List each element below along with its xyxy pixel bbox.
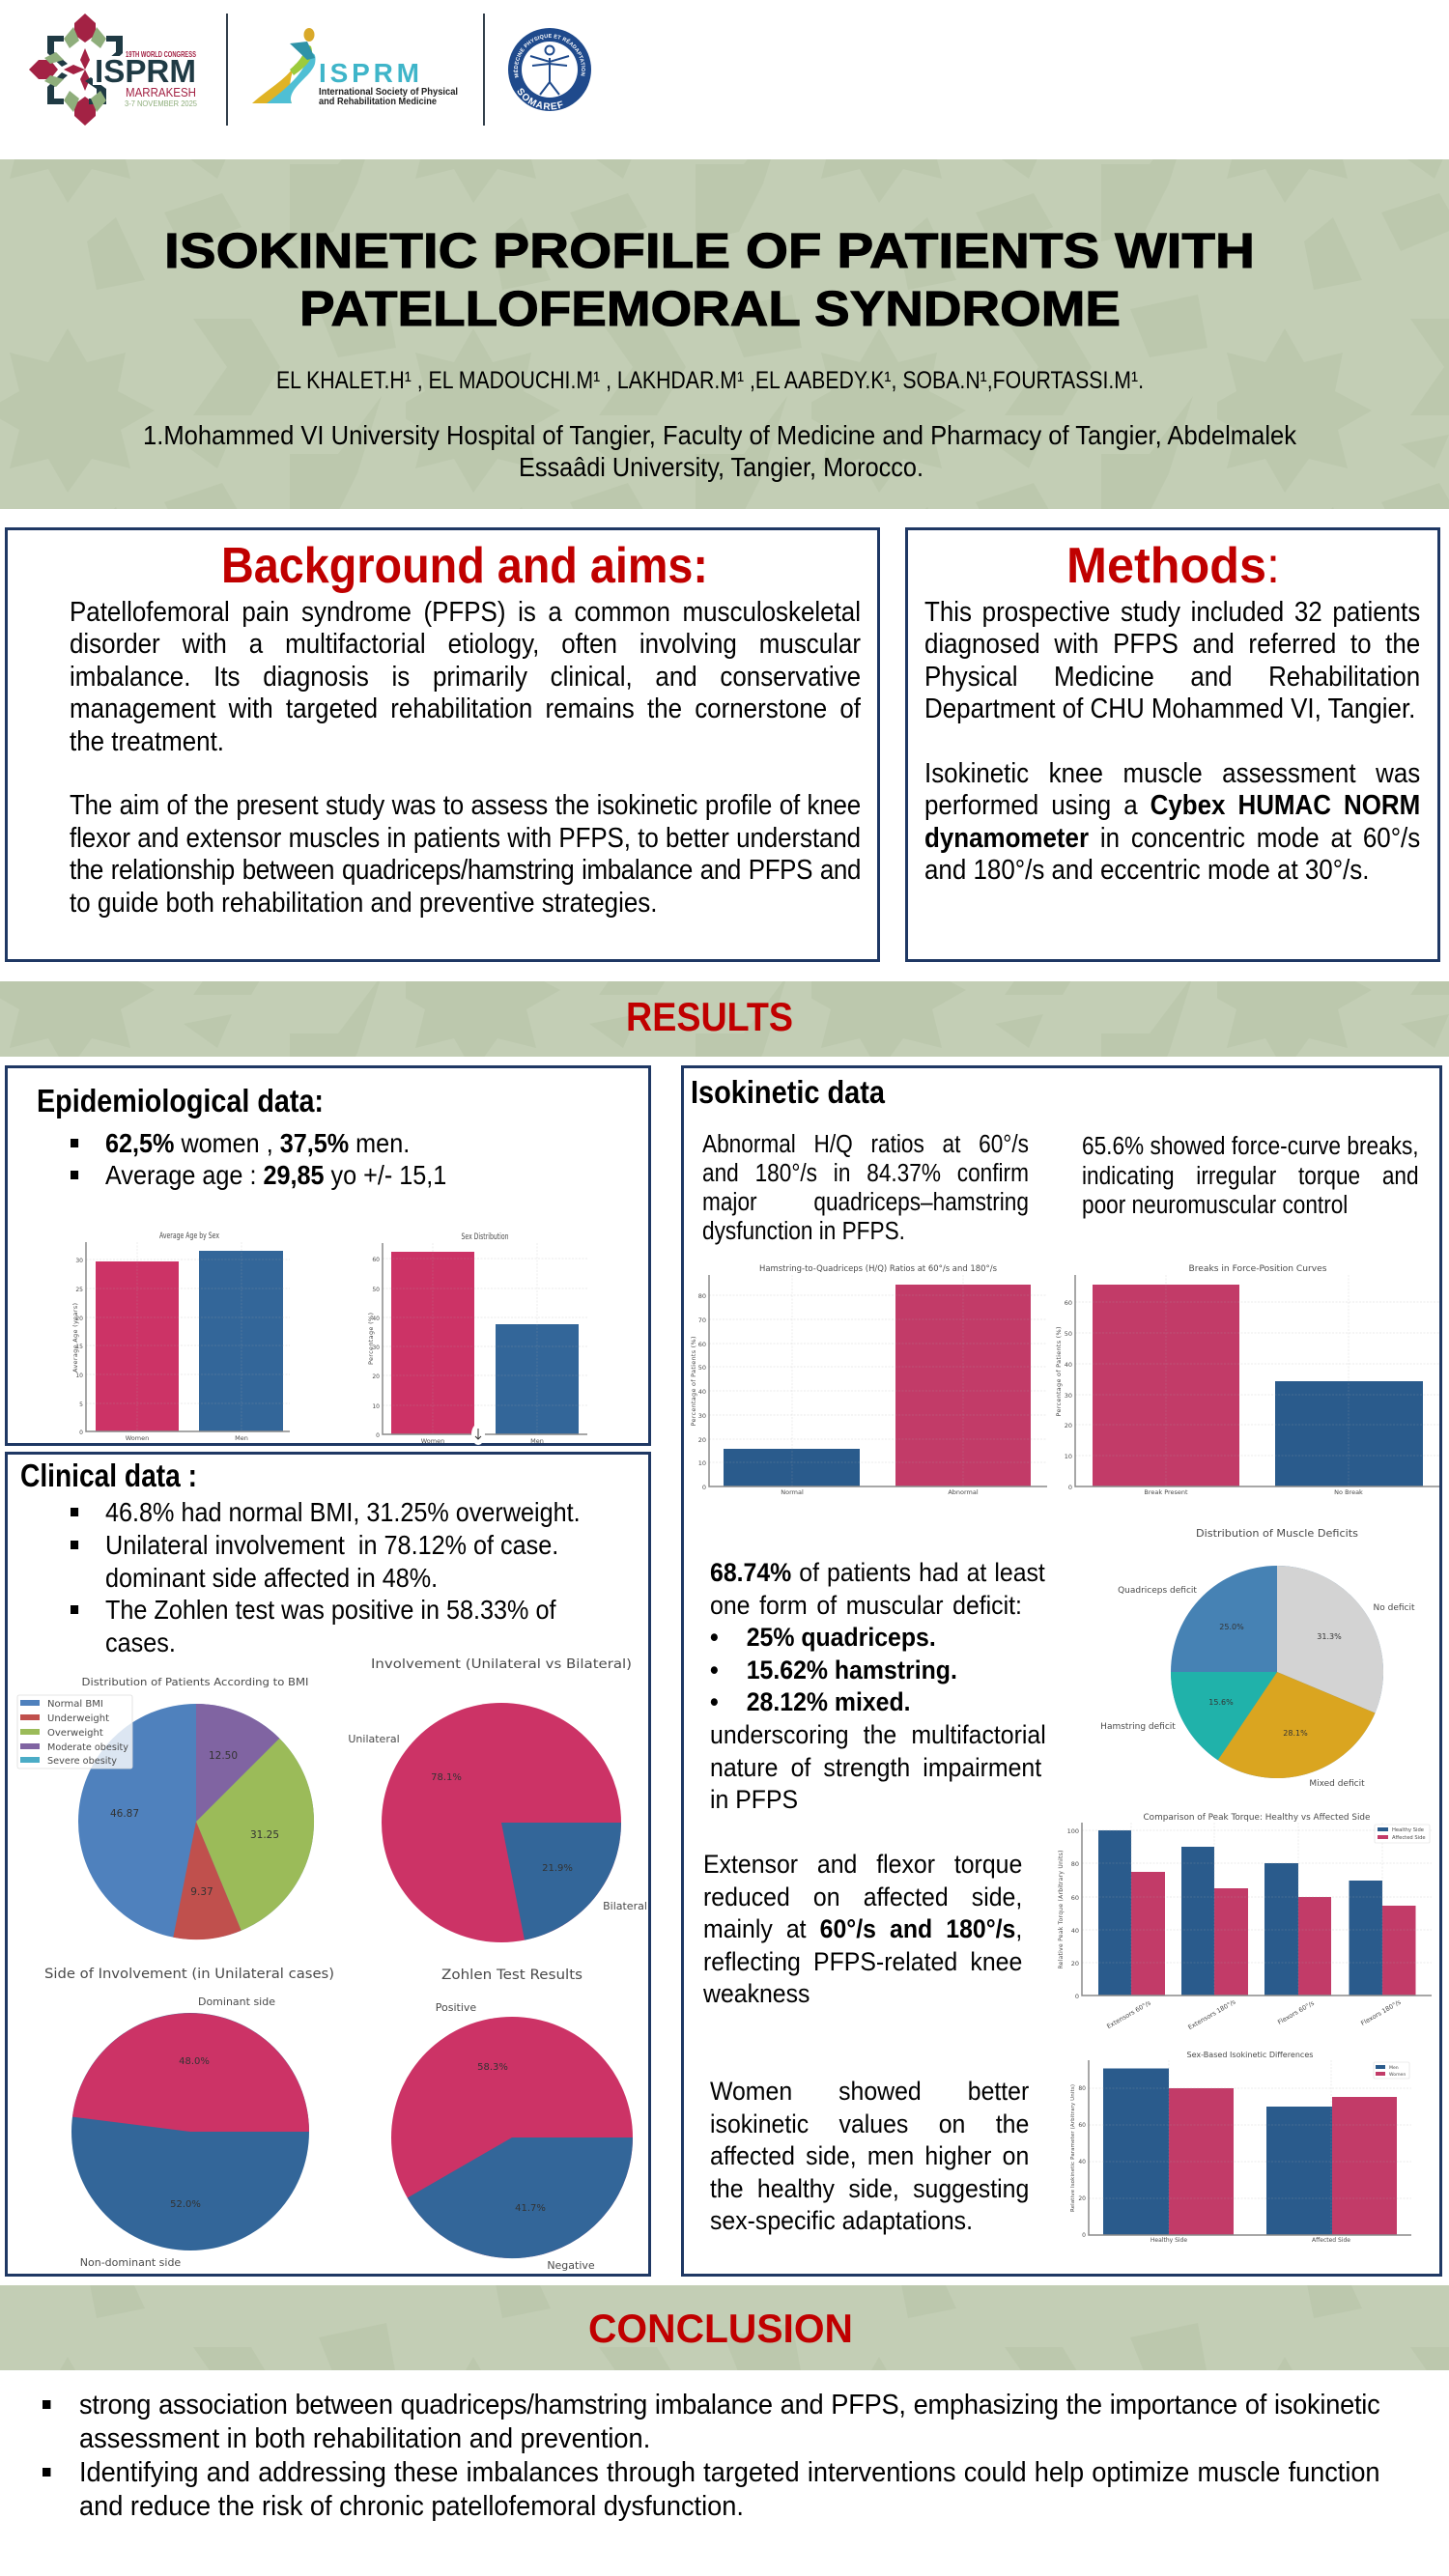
legend: BMI categories: Overweight [47,1728,103,1739]
chart: sex distribution [367,1232,587,1445]
chart: breaks in force-position curves: 50 [1065,1330,1072,1338]
logo: ISPRM society: and Rehabilitation Medicine [319,97,437,107]
chart: sex-based isokinetic differences: Sex-Based Isokinetic Differences [1186,2051,1314,2059]
chart: breaks in force-position curves: 0 [1068,1484,1072,1491]
chart: peak torque comparison: Extensors 60°/s [1105,1998,1152,2030]
chart: side of involvement pie [44,1967,334,2269]
list: conclusion [43,2390,1379,2522]
chart: BMI pie: 46.87 [110,1808,139,1820]
text: muscular deficit finding: • [710,1687,719,1716]
chart: average age by sex: Women [126,1434,149,1442]
chart: average age by sex [71,1231,290,1442]
chart: sex distribution: 50 [372,1287,380,1293]
text: methods: Department of CHU Mohammed VI, Tangier. [924,694,1415,724]
text: muscular deficit finding: 15.62% hamstring. [747,1656,957,1684]
title [164,223,1255,336]
affiliation [143,420,1297,482]
chart: muscle deficits pie [1100,1528,1415,1789]
chart: involvement pie: Unilateral [348,1733,400,1745]
chart: H/Q ratios: 70 [698,1316,706,1324]
chart: peak torque comparison: 100 [1067,1827,1079,1835]
list: conclusion: strong association between quadriceps/hamstring imbalance and PFPS, emphasizing the importance of isokinetic [79,2390,1379,2420]
text: methods: Physical Medicine and Rehabilitation [924,662,1420,693]
chart: peak torque comparison: Relative Peak Torque (Arbitrary Units) [1058,1851,1065,1968]
logo: SOMAREF: SOMAREF [518,88,563,110]
logo: ISPRM society: ISPRM [319,58,419,88]
chart: side of involvement pie: Dominant side [198,1996,275,2008]
text: muscular deficit finding: 25% quadriceps. [747,1623,936,1652]
chart: average age by sex: 0 [79,1430,83,1436]
title: ISOKINETIC PROFILE OF PATIENTS WITH [164,223,1255,278]
panel: clinical data [5,1452,651,2277]
chart: sex-based isokinetic differences: Affected Side [1312,2237,1350,2244]
chart: muscle deficits pie: 25.0% [1219,1623,1244,1631]
chart: sex-based isokinetic differences: 60 [1078,2122,1086,2129]
chart: breaks in force-position curves: 20 [1065,1422,1072,1430]
list: clinical findings: The Zohlen test was positive in 58.33% of [105,1595,555,1625]
legend: men vs women [1374,2062,1409,2079]
chart: sex-based isokinetic differences: 40 [1078,2159,1086,2166]
chart: sex distribution: Percentage (%) [367,1313,375,1365]
chart: side of involvement pie: 52.0% [170,2199,201,2210]
list: clinical findings: dominant side affected in 48%. [105,1563,438,1593]
chart: Zohlen test pie: Zohlen Test Results [441,1967,582,1983]
chart: side of involvement pie: Side of Involvement (in Unilateral cases) [44,1967,334,1982]
chart: peak torque comparison: Flexors 180°/s [1359,1997,1403,2027]
chart: sex distribution: Women [421,1437,444,1445]
logo: ISPRM Marrakesh congress [29,14,199,126]
legend: BMI categories: Underweight [47,1713,109,1724]
logo: ISPRM Marrakesh congress: 3-7 NOVEMBER 2025 [125,99,197,108]
chart: Zohlen test pie: 58.3% [477,2062,508,2073]
chart: H/Q ratios [690,1264,1047,1496]
chart: average age by sex: Men [235,1434,248,1442]
chart: average age by sex: Average Age by Sex [159,1231,219,1241]
chart: peak torque comparison: 80 [1071,1860,1079,1868]
chart: average age by sex: 30 [75,1258,83,1264]
panel: epidemiological data [5,1065,651,1446]
text: sex-based finding: Women showed better [710,2077,1029,2106]
chart: breaks in force-position curves: Breaks in Force-Position Curves [1188,1264,1327,1274]
text: muscular deficit finding [710,1558,1046,1814]
chart: Zohlen test pie: Negative [547,2259,595,2272]
text: force-curve finding: indicating irregular torque and [1082,1163,1419,1190]
text: methods: and 180°/s and eccentric mode at 30°/s. [924,855,1369,886]
text: muscular deficit finding: 68.74% of patients had at least [710,1558,1045,1587]
text: H/Q ratio finding: Abnormal H/Q ratios at 60°/s [702,1131,1029,1158]
text: methods: dynamometer in concentric mode at 60°/s [924,823,1420,854]
chart: muscle deficits pie: No deficit [1374,1603,1415,1613]
chart: Zohlen test pie: Positive [436,2001,476,2014]
chart: sex-based isokinetic differences: 80 [1078,2085,1086,2092]
chart: involvement pie: Involvement (Unilateral vs Bilateral) [371,1656,632,1672]
text: sex-based finding: isokinetic values on the [710,2109,1029,2138]
logo: ISPRM society [252,28,458,107]
chart: BMI pie: 9.37 [190,1886,213,1898]
chart: average age by sex: 20 [75,1316,83,1322]
chart: peak torque comparison: Comparison of Peak Torque: Healthy vs Affected Side [1144,1813,1370,1823]
list: conclusion: Identifying and addressing these imbalances through targeted interventions could help optimize muscle function [79,2457,1379,2488]
chart: breaks in force-position curves: Percentage of Patients (%) [1055,1327,1063,1416]
chart: breaks in force-position curves: No Break [1334,1488,1363,1496]
chart: muscle deficits pie: Mixed deficit [1309,1779,1365,1789]
chart: BMI pie: Distribution of Patients According to BMI [81,1676,309,1688]
chart: involvement pie: 21.9% [542,1863,573,1874]
text: background and aims: the treatment. [70,726,224,757]
chart: H/Q ratios: 80 [698,1292,706,1300]
chart: sex distribution: Men [530,1437,544,1445]
chart: muscle deficits pie: 31.3% [1317,1632,1342,1641]
chart: peak torque comparison: 0 [1075,1993,1079,2000]
affiliation: 1.Mohammed VI University Hospital of Tangier, Faculty of Medicine and Pharmacy of Tangier, Abdelmalek [143,420,1297,450]
text: H/Q ratio finding [702,1131,1029,1245]
text: H/Q ratio finding: major quadriceps–hamstring [702,1189,1029,1216]
list: clinical findings: Unilateral involvement in 78.12% of case. [105,1530,558,1560]
chart: sex-based isokinetic differences: 0 [1082,2232,1086,2239]
chart: muscle deficits pie: Hamstring deficit [1100,1722,1176,1732]
text: H/Q ratio finding: and 180°/s in 84.37% confirm [702,1160,1029,1187]
text: muscular deficit finding: in PFPS [710,1785,798,1814]
authors: EL KHALET.H¹ , EL MADOUCHI.M¹ , LAKHDAR.M¹ ,EL AABEDY.K¹, SOBA.N¹,FOURTASSI.M¹. [276,367,1144,394]
text: torque finding: weakness [703,1979,810,2008]
chart: average age by sex: Average Age (years) [71,1303,79,1373]
chart: Zohlen test pie: 41.7% [515,2203,546,2214]
panel: methods [905,527,1440,962]
text: H/Q ratio finding: dysfunction in PFPS. [702,1218,905,1245]
chart: BMI pie: 31.25 [250,1829,279,1841]
text: background and aims: imbalance. Its diagnosis is primarily clinical, and conservative [70,662,860,693]
text: torque finding: reduced on affected side, [703,1882,1022,1911]
chart: breaks in force-position curves: 30 [1065,1392,1072,1400]
legend: men vs women: Men [1389,2065,1399,2071]
band: conclusion [0,2285,1449,2370]
list: epidemiological findings: Average age : 29,85 yo +/- 15,1 [105,1160,446,1190]
text: background and aims: to guide both rehabilitation and preventive strategies. [70,888,657,919]
chart: sex distribution: 40 [372,1316,380,1322]
chart: sex distribution: 30 [372,1345,380,1351]
chart: average age by sex: 5 [79,1401,83,1408]
heading: isokinetic data: Isokinetic data [691,1074,886,1110]
chart: H/Q ratios: 0 [702,1484,706,1491]
text: sex-based finding: the healthy side, suggesting [710,2174,1029,2203]
chart: sex distribution: 20 [372,1373,380,1380]
chart: average age by sex: 25 [75,1287,83,1293]
chart: muscle deficits pie: Quadriceps deficit [1118,1586,1197,1596]
chart: H/Q ratios: 50 [698,1364,706,1372]
heading: background and aims: Background and aims: [221,538,708,594]
chart: involvement pie: 78.1% [431,1772,462,1783]
list: clinical findings: cases. [105,1628,176,1657]
band: title background [0,159,1449,509]
chart: breaks in force-position curves: 40 [1065,1361,1072,1369]
band: results [0,981,1449,1057]
list: clinical findings: 46.8% had normal BMI, 31.25% overweight. [105,1497,581,1527]
chart: peak torque comparison: Flexors 60°/s [1276,1999,1316,2026]
logo: SOMAREF: MÉDECINE PHYSIQUE ET RÉADAPTATION [513,34,585,77]
chart: H/Q ratios: Normal [781,1488,804,1496]
chart: H/Q ratios: Abnormal [948,1488,979,1496]
logo: ISPRM society: International Society of Physical [319,87,458,98]
text: methods [924,597,1420,886]
panel: background and aims [5,527,880,962]
legend: men vs women: Women [1389,2072,1406,2078]
chart: peak torque comparison: 60 [1071,1894,1079,1902]
divider [226,14,228,126]
logo: ISPRM Marrakesh congress: 19TH WORLD CONGRESS [126,50,196,59]
chart: H/Q ratios: 40 [698,1388,706,1396]
chart: sex distribution: 60 [372,1257,380,1263]
chart: involvement pie: Bilateral [603,1900,647,1912]
heading: methods: Methods: [1066,538,1280,594]
chart: sex-based isokinetic differences [1070,2051,1411,2244]
chart: sex distribution: 10 [372,1403,380,1410]
text: background and aims: The aim of the present study was to assess the isokinetic profile of knee [70,790,860,821]
legend: healthy vs affected side: Healthy Side [1392,1827,1424,1833]
text: force-curve finding [1082,1133,1419,1219]
text: background and aims: the relationship between quadriceps/hamstring imbalance and PFPS and [70,855,860,886]
chart: involvement pie [348,1656,647,1942]
heading: epidemiological data: Epidemiological data: [37,1083,324,1118]
chart: muscle deficits pie: 15.6% [1208,1698,1234,1707]
text: torque finding: Extensor and flexor torque [703,1850,1022,1879]
text: background and aims [70,597,861,919]
text: force-curve finding: poor neuromuscular control [1082,1192,1348,1219]
chart: sex-based isokinetic differences: Relative Isokinetic Parameter (Arbitrary Units) [1070,2084,1076,2212]
list: epidemiological findings [71,1128,446,1190]
text: muscular deficit finding: nature of strength impairment [710,1753,1041,1782]
title: PATELLOFEMORAL SYNDROME [299,281,1121,336]
list: clinical findings [71,1497,581,1657]
text: sex-based finding [710,2077,1029,2235]
chart: side of involvement pie: 48.0% [179,2056,210,2067]
chart: side of involvement pie: Non-dominant side [80,2256,181,2269]
chart: average age by sex: 10 [75,1373,83,1379]
legend: healthy vs affected side: Affected Side [1392,1835,1426,1841]
chart: breaks in force-position curves [1055,1264,1439,1496]
text: background and aims: management with targeted rehabilitation remains the cornerstone of [70,694,860,724]
chart: H/Q ratios: 20 [698,1436,706,1444]
chart: breaks in force-position curves: 10 [1065,1453,1072,1460]
text: muscular deficit finding: • [710,1656,719,1684]
list: conclusion: assessment in both rehabilitation and prevention. [79,2423,650,2454]
chart: sex distribution: 0 [376,1432,380,1439]
chart: H/Q ratios: 60 [698,1341,706,1348]
text: muscular deficit finding: 28.12% mixed. [747,1687,911,1716]
chart: sex-based isokinetic differences: 20 [1078,2195,1086,2202]
chart: BMI pie [17,1676,314,1939]
list: epidemiological findings: 62,5% women , 37,5% men. [105,1128,410,1158]
panel: isokinetic data [681,1065,1442,2277]
chart: H/Q ratios: 10 [698,1459,706,1467]
heading: conclusion: CONCLUSION [588,2306,853,2351]
chart: average age by sex: 15 [75,1344,83,1350]
affiliation: Essaâdi University, Tangier, Morocco. [519,452,923,482]
text: torque finding [703,1850,1022,2008]
chart: muscle deficits pie: Distribution of Muscle Deficits [1196,1528,1358,1540]
text: sex-based finding: affected side, men higher on [710,2141,1029,2170]
text: methods: performed using a Cybex HUMAC NORM [924,790,1420,821]
legend: BMI categories: Moderate obesity [47,1742,128,1753]
text: muscular deficit finding: underscoring the multifactorial [710,1720,1046,1749]
text: torque finding: reflecting PFPS-related knee [703,1947,1022,1976]
chart: peak torque comparison: 20 [1071,1960,1079,1967]
text: background and aims: Patellofemoral pain syndrome (PFPS) is a common musculoskeletal [70,597,860,628]
divider [483,14,485,126]
text: force-curve finding: 65.6% showed force-curve breaks, [1082,1133,1419,1160]
chart: Zohlen test pie [391,1967,633,2272]
chart: sex distribution: Sex Distribution [462,1232,508,1242]
chart: breaks in force-position curves: Break Present [1144,1488,1188,1496]
text: background and aims: disorder with a multifactorial etiology, often involving muscular [70,629,860,660]
logo: ISPRM Marrakesh congress: ISPRM [95,53,196,89]
heading: results: RESULTS [626,994,793,1039]
list: conclusion: and reduce the risk of chronic patellofemoral dysfunction. [79,2491,744,2522]
text: muscular deficit finding: one form of muscular deficit: [710,1591,1022,1620]
text: methods: Isokinetic knee muscle assessment was [924,758,1420,789]
chart: BMI pie: 12.50 [209,1750,238,1762]
text: torque finding: mainly at 60°/s and 180°/s, [703,1914,1022,1943]
logo: ISPRM Marrakesh congress: MARRAKESH [126,85,196,99]
chart: H/Q ratios: 30 [698,1412,706,1420]
chart: peak torque comparison: Extensors 180°/s [1187,1997,1237,2031]
heading: clinical data: Clinical data : [20,1458,197,1493]
text: methods: diagnosed with PFPS and referred to the [924,629,1420,660]
chart: peak torque comparison: 40 [1071,1927,1079,1935]
chart: sex-based isokinetic differences: Healthy Side [1151,2237,1187,2244]
chart: muscle deficits pie: 28.1% [1283,1729,1308,1738]
legend: BMI categories [17,1695,132,1769]
text: muscular deficit finding: • [710,1623,719,1652]
legend: healthy vs affected side [1375,1825,1430,1843]
chart: H/Q ratios: Hamstring-to-Quadriceps (H/Q) Ratios at 60°/s and 180°/s [759,1264,997,1274]
legend: BMI categories: Normal BMI [47,1699,103,1710]
chart: H/Q ratios: Percentage of Patients (%) [690,1337,697,1426]
text: methods: This prospective study included 32 patients [924,597,1420,628]
legend: BMI categories: Severe obesity [47,1756,117,1767]
chart: breaks in force-position curves: 60 [1065,1299,1072,1307]
text: background and aims: flexor and extensor muscles in patients with PFPS, to better understand [70,823,860,854]
chart: peak torque comparison [1058,1813,1432,2031]
logo: SOMAREF [508,28,591,111]
text: sex-based finding: sex-specific adaptations. [710,2206,973,2235]
